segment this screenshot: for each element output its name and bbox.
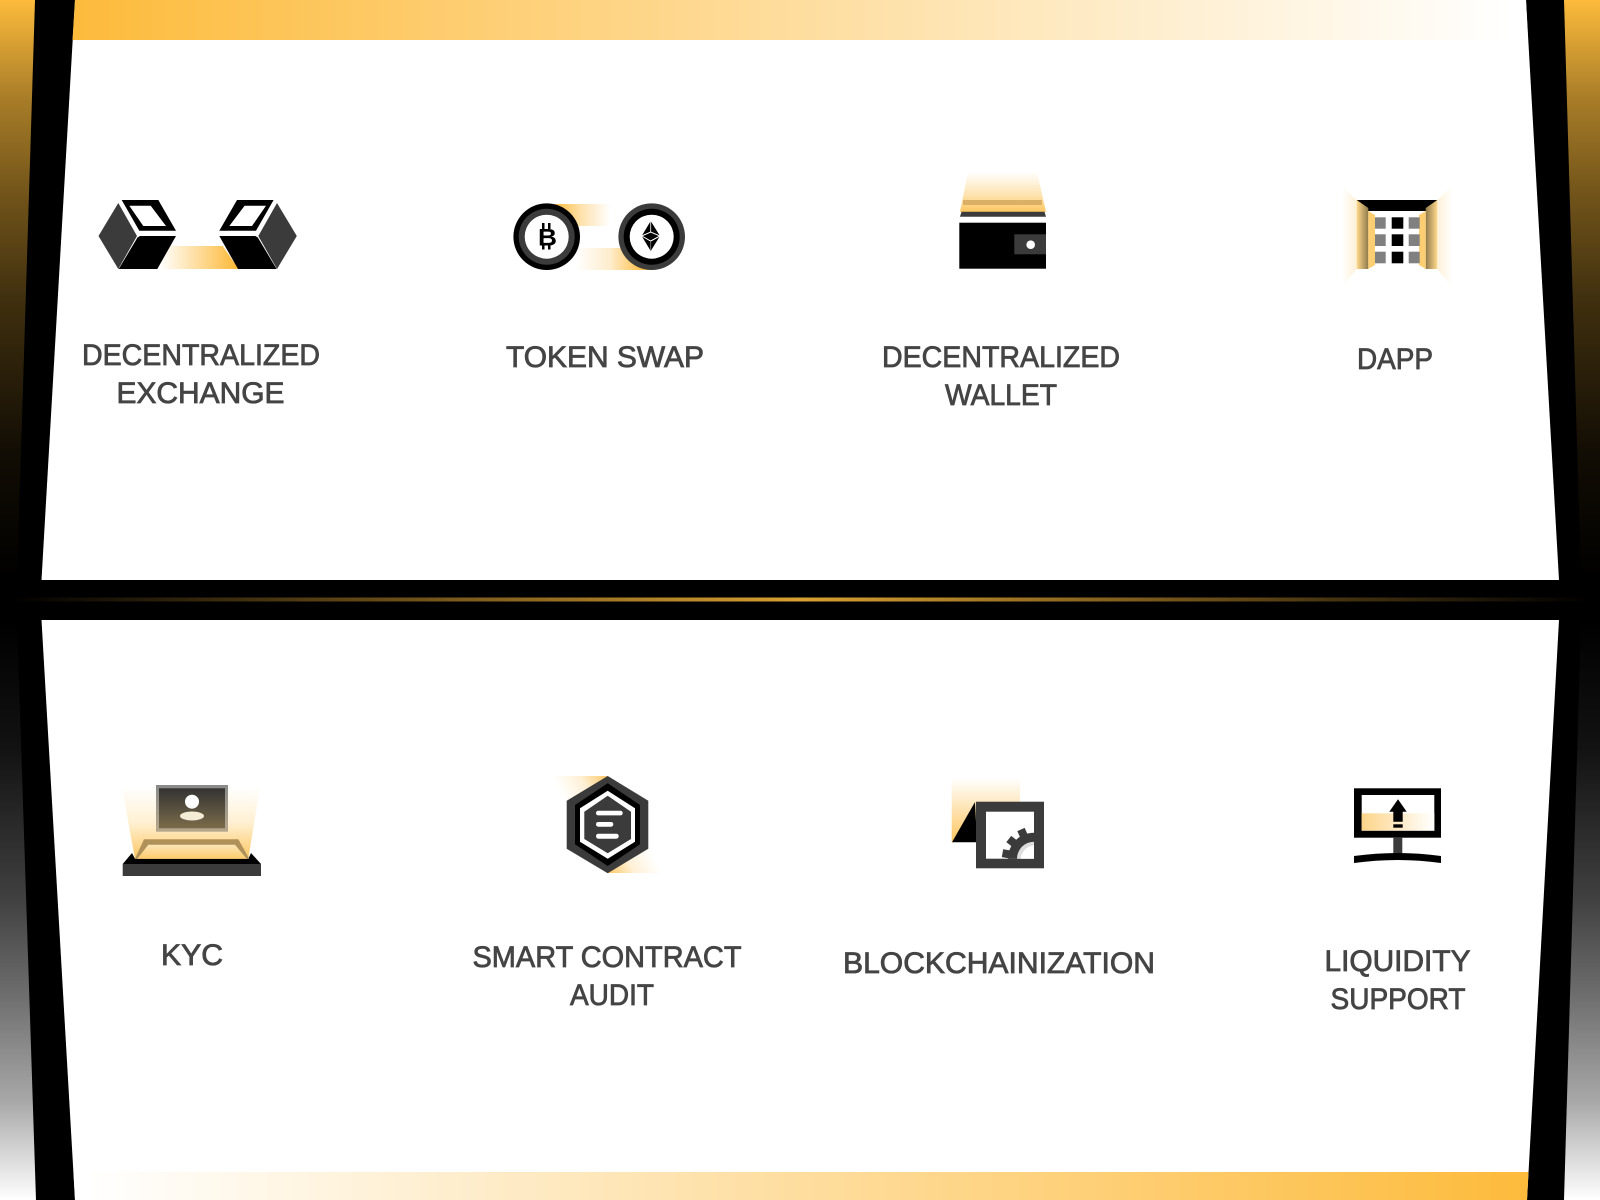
icon: audit hexagon: [553, 776, 663, 873]
label: smart contract audit: SMART CONTRACT: [472, 941, 742, 974]
top gold bar: [72, 0, 1528, 40]
label: decentralized wallet: [882, 341, 1120, 412]
label: dapp: DAPP: [1357, 343, 1433, 376]
item: decentralized exchange: [82, 200, 320, 410]
item: dapp: [1342, 187, 1452, 376]
item: smart contract audit: [472, 776, 742, 1012]
item: kyc: [122, 785, 261, 972]
left edge gradient strip, bottom: [0, 620, 36, 1200]
label: liquidity support: LIQUIDITY: [1324, 945, 1470, 978]
label: blockchainization: BLOCKCHAINIZATION: [843, 947, 1155, 980]
item: decentralized wallet: [882, 172, 1120, 412]
icon: exchange cubes: [98, 200, 297, 269]
label: token swap: TOKEN SWAP: [506, 341, 704, 374]
label: liquidity support: [1324, 945, 1470, 1016]
right edge gradient strip, bottom: [1564, 620, 1600, 1200]
item: token swap: [506, 203, 704, 374]
icon: monitor with up arrow: [1354, 788, 1441, 863]
panel: top services: [42, 0, 1559, 580]
icon: wallet: [959, 172, 1046, 269]
label: liquidity support: SUPPORT: [1330, 983, 1466, 1016]
icon: blockchain gear: [952, 782, 1044, 868]
label: decentralized exchange: EXCHANGE: [116, 377, 284, 410]
central divider line: [10, 598, 1590, 602]
label: decentralized exchange: DECENTRALIZED: [82, 339, 320, 372]
panel background: [42, 620, 1559, 1200]
label: decentralized exchange: [82, 339, 320, 410]
bottom gold bar: [74, 1172, 1528, 1200]
label: smart contract audit: AUDIT: [570, 979, 654, 1012]
icon: dapp window: [1342, 187, 1452, 287]
icon: token swap coins: B: [538, 224, 557, 252]
label: smart contract audit: [472, 941, 742, 1012]
left edge gradient strip, top: [0, 0, 35, 580]
right edge gradient strip, top: [1564, 0, 1600, 580]
label: decentralized wallet: WALLET: [945, 379, 1057, 412]
label: decentralized wallet: DECENTRALIZED: [882, 341, 1120, 374]
item: liquidity support: [1324, 788, 1470, 1016]
icon: kyc laptop: [122, 785, 261, 876]
panel: bottom services: [42, 620, 1559, 1200]
icon: token swap coins: [513, 203, 685, 270]
panel background: [42, 0, 1559, 580]
item: blockchainization: [843, 778, 1155, 980]
label: kyc: KYC: [161, 939, 223, 972]
